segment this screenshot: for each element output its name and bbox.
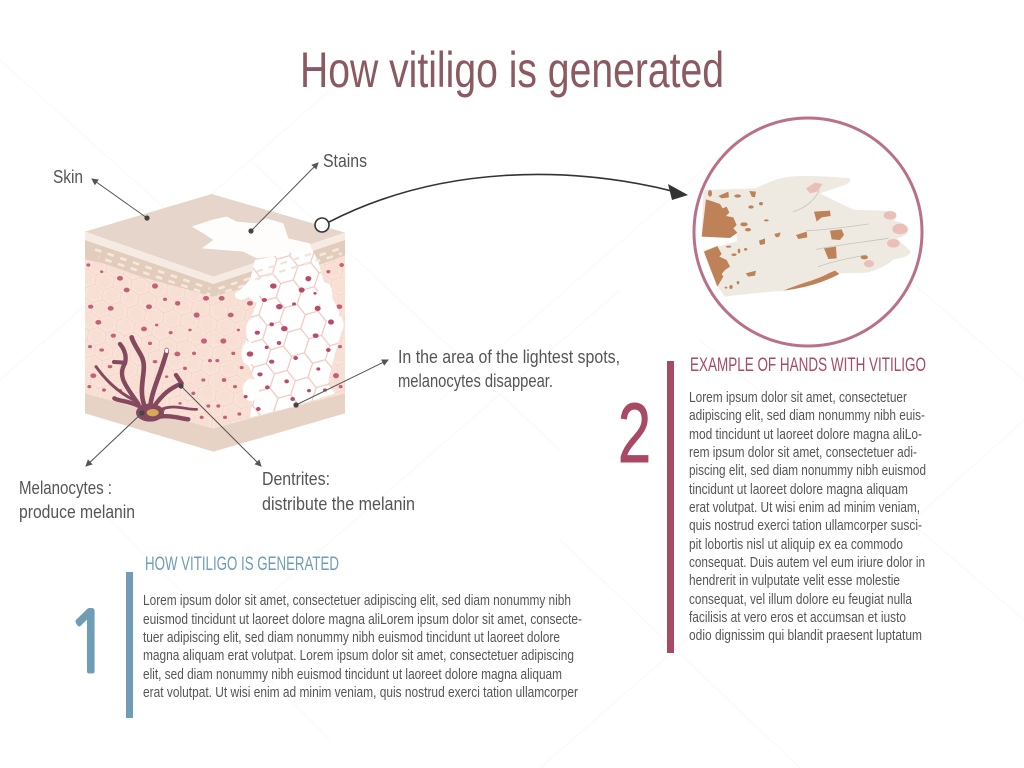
finger lines	[793, 190, 888, 267]
block 1 body text	[143, 593, 582, 701]
label: stains: Stains	[323, 151, 367, 171]
scalloped white cell edge	[235, 278, 344, 401]
label: melanocytes	[19, 478, 135, 522]
block 2 body text: piscing elit, sed diam nonummy nibh euismod	[689, 463, 926, 479]
pale dashes over the depigmented layer	[255, 253, 318, 279]
upper brown layer	[85, 240, 345, 297]
pink nails	[806, 183, 908, 267]
label: dentrites	[262, 469, 415, 514]
block 2 body text: consequat. Duis autem vel eum iriure dolor in	[689, 555, 925, 571]
block 2 body text: erat volutpat. Ut wisi enim ad minim veniam,	[689, 500, 920, 516]
label: lightest spots	[398, 347, 620, 391]
block 2 body text: quis nostrud exerci tation ullamcorper susci-	[689, 518, 922, 534]
leader line: dentrites	[178, 383, 261, 466]
label: melanocytes: produce melanin	[19, 502, 135, 522]
block 2 number: 2	[618, 386, 651, 480]
title: How vitiligo is generated	[300, 42, 724, 98]
label: skin: Skin	[53, 167, 83, 187]
left face of the cube	[85, 240, 213, 428]
leader line: melanocytes	[86, 410, 145, 466]
bottom skin band	[85, 393, 345, 452]
leader line: skin	[92, 179, 150, 221]
leader line: stains	[248, 163, 318, 234]
block 1 body text: tuer adipiscing elit, sed diam nonummy nibh euismod tincidunt ut laoreet dolore	[143, 630, 560, 646]
white stain on the top surface	[192, 217, 312, 258]
block 2 body text: tincidunt ut laoreet dolore magna aliquam	[689, 482, 908, 498]
nuclei of pigmented cells	[86, 263, 344, 419]
melanocyte cell	[96, 337, 197, 422]
depigmented cell region	[235, 248, 344, 417]
block 2 body text: pit lobortis nisl ut aliquip ex ea commodo	[689, 537, 903, 553]
right face of the cube	[213, 240, 345, 428]
light dashes in upper layer	[95, 248, 342, 295]
block 2 body text	[689, 390, 926, 644]
leader line: lightest spots	[293, 360, 388, 408]
block 1 heading: HOW VITILIGO IS GENERATED	[145, 554, 339, 575]
label: dentrites: distribute the melanin	[262, 494, 415, 514]
block 2 body text: consequat, vel illum dolore eu feugiat nulla	[689, 592, 913, 608]
top surface	[85, 194, 345, 277]
block 2 body text: rem ipsum dolor sit amet, consectetuer adi-	[689, 445, 917, 461]
block 2 vertical bar	[667, 361, 674, 653]
block 2 body text: facilisis at vero eros et accumsan et iusto	[689, 610, 906, 626]
label: melanocytes: Melanocytes :	[19, 478, 112, 498]
block 2 body text: hendrerit in vulputate velit esse molestie	[689, 573, 900, 589]
circle frame	[694, 118, 922, 346]
block 1 body text: magna aliquam erat volutpat. Lorem ipsum dolor sit amet, consectetuer adipiscing	[143, 648, 574, 664]
hand illustration in circle	[694, 118, 922, 346]
block 2 heading: EXAMPLE OF HANDS WITH VITILIGO	[690, 355, 926, 376]
block 2 body text: odio dignissim qui blandit praesent luptatum	[689, 628, 922, 644]
light edge strip	[85, 232, 345, 284]
block 1 body text: erat volutpat. Ut wisi enim ad minim veniam, quis nostrud exerci tation ullamcorper	[143, 685, 578, 701]
block 1 body text: euismod tincidunt ut laoreet dolore magna aliLorem ipsum dolor sit amet, consecte-	[143, 612, 582, 628]
brown pigment patches	[702, 190, 868, 291]
block 1 vertical bar	[126, 572, 133, 718]
curved arrow from cube to hand	[315, 174, 688, 232]
block 2 body text: Lorem ipsum dolor sit amet, consectetuer	[689, 390, 907, 406]
block 2 body text: mod tincidunt ut laoreet dolore magna aliLo-	[689, 427, 922, 443]
nuclei of white cells	[244, 276, 334, 411]
block 1 body text: Lorem ipsum dolor sit amet, consectetuer adipiscing elit, sed diam nonummy nibh	[143, 593, 571, 609]
block 1 body text: elit, sed diam nonummy nibh euismod tincidunt ut laoreet dolore magna aliquam	[143, 667, 562, 683]
block 2 body text: adipiscing elit, sed diam nonummy nibh euis-	[689, 408, 925, 424]
label: dentrites: Dentrites:	[262, 469, 330, 489]
hand	[702, 176, 911, 297]
block 1 number: 1	[66, 601, 110, 685]
label: lightest spots: melanocytes disappear.	[398, 371, 553, 391]
skin cube illustration	[85, 194, 345, 452]
label: lightest spots: In the area of the lightest spots,	[398, 347, 620, 367]
